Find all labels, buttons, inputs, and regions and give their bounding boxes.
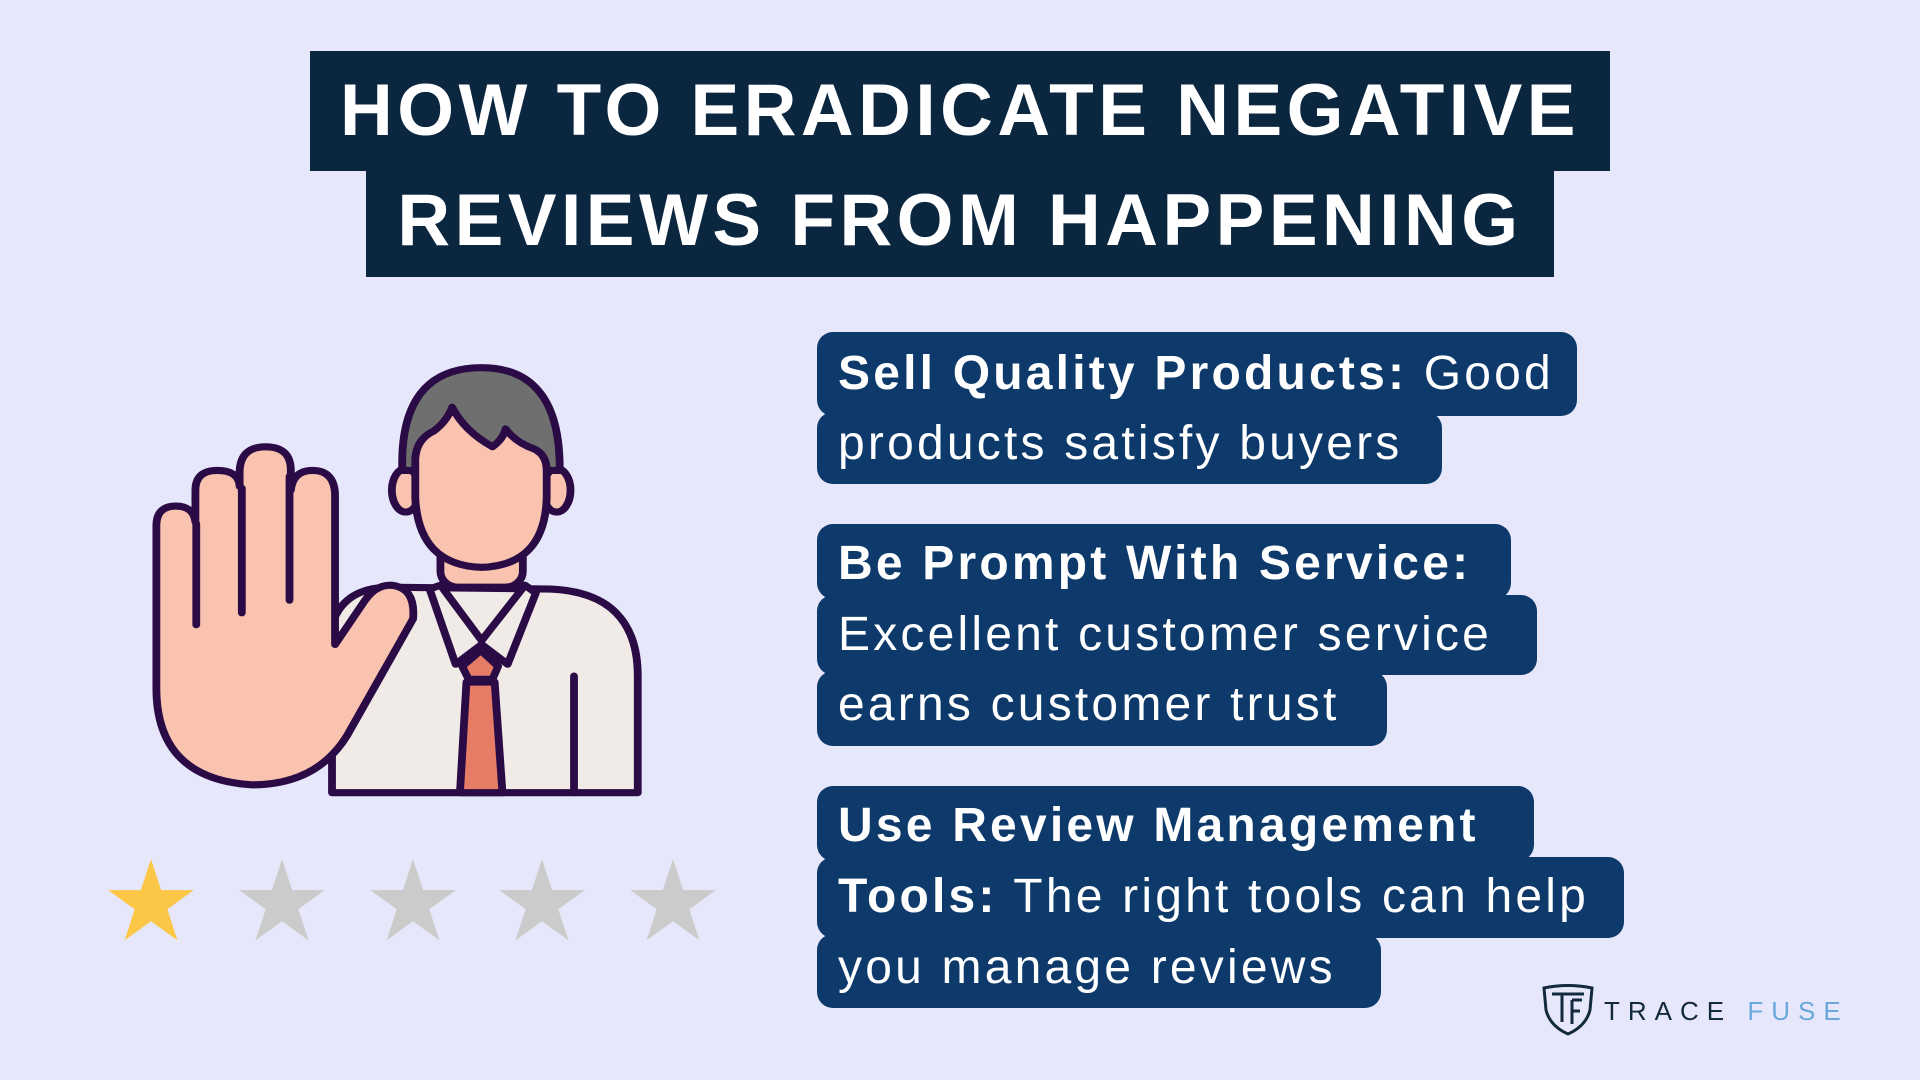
- illustration: man with stop hand: [152, 364, 642, 796]
- title line 1: HOW TO ERADICATE NEGATIVE: [340, 70, 1580, 151]
- logo text: TRACE FUSE: [1604, 996, 1849, 1026]
- panel: sell quality products: [817, 332, 1577, 484]
- panel: use review management tools: you manage reviews: [838, 941, 1336, 994]
- panel: use review management tools: Tools: The right tools can help: [838, 870, 1589, 923]
- panel: be prompt with service: [817, 524, 1537, 746]
- panel: sell quality products: Sell Quality Products: Good: [838, 347, 1554, 400]
- panel: use review management tools: [817, 786, 1624, 1008]
- title line 2: REVIEWS FROM HAPPENING: [397, 180, 1523, 261]
- panel: sell quality products: products satisfy buyers: [838, 417, 1402, 470]
- title: [310, 51, 1610, 277]
- panel: be prompt with service: Be Prompt With Service:: [838, 537, 1471, 590]
- panel: be prompt with service: Excellent customer service: [838, 608, 1492, 661]
- panel: be prompt with service: earns customer trust: [838, 678, 1339, 731]
- panel: use review management tools: Use Review Management: [838, 799, 1479, 852]
- icon: shield: [1542, 984, 1594, 1036]
- title line 1: [310, 51, 1610, 171]
- logo: trace fuse: [1542, 984, 1849, 1036]
- star rating: 1 of 5: [108, 859, 716, 940]
